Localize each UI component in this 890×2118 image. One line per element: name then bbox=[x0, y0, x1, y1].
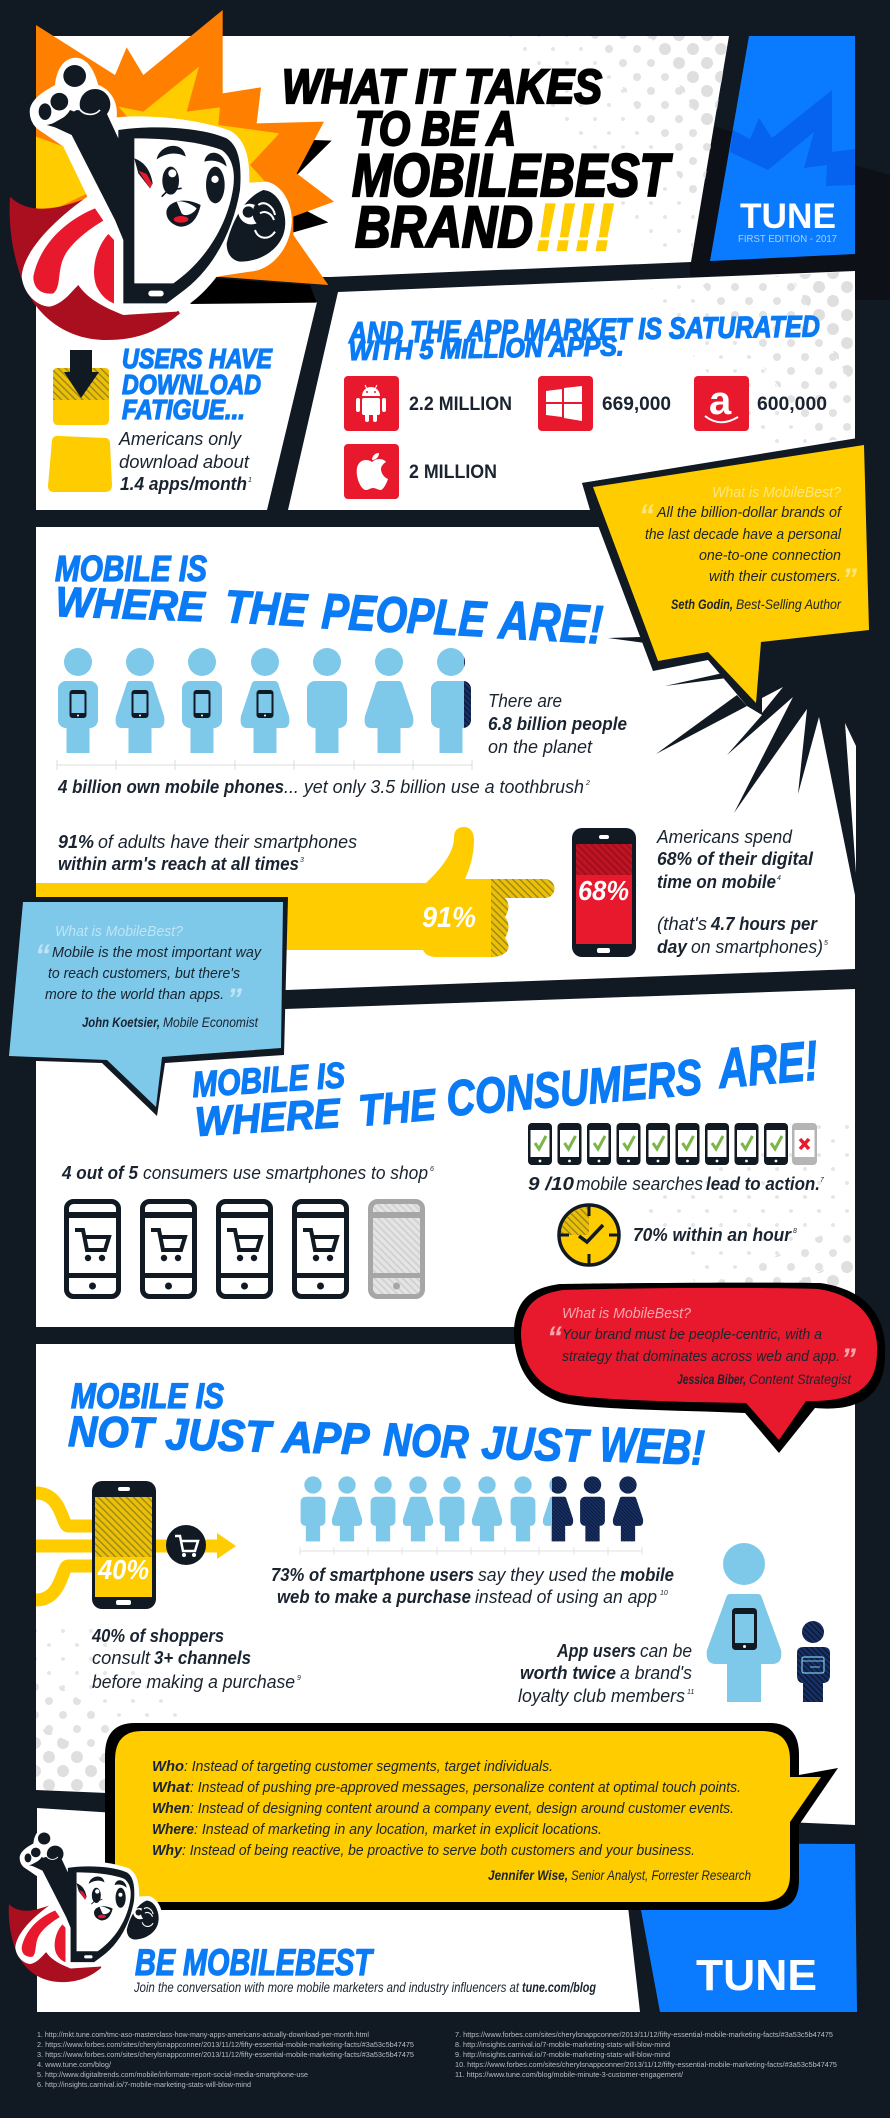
text: searches lead to action: 7 bbox=[820, 1177, 825, 1184]
panel: TUNE first edition: TUNE bbox=[740, 197, 836, 236]
text: join the conversation: Join the conversation with more mobile marketers and industry influencers at bbox=[133, 1979, 520, 1995]
text: mobile web purchase: say they used the bbox=[478, 1565, 616, 1585]
text: app users loyalty: App users bbox=[556, 1641, 636, 1661]
callout: blue John Koetsier quote: John Koetsier, bbox=[82, 1015, 160, 1030]
text: arm's reach bbox=[58, 832, 357, 874]
text: toothbrush fact bbox=[57, 777, 590, 797]
callout: red Jessica Biber quote: What is MobileBest? bbox=[562, 1305, 692, 1322]
text: americans download: download about bbox=[119, 452, 250, 472]
icon: app user and loyalty member bbox=[707, 1543, 830, 1702]
panel: TUNE first edition: FIRST EDITION - 2017 bbox=[738, 233, 837, 245]
icon: cart circle bbox=[166, 1525, 206, 1565]
text: app users loyalty: 11 bbox=[687, 1689, 694, 1696]
heading: mobile is where the people are: PEOPLE bbox=[320, 583, 488, 648]
panel: footer bbox=[37, 1808, 640, 2012]
icon: download arrow with app tiles bbox=[48, 350, 112, 492]
icon: starburst behind mascot bbox=[36, 10, 334, 304]
text: mobile web purchase: instead of using an app bbox=[475, 1587, 657, 1607]
text: mobile web purchase: 73% of smartphone users bbox=[271, 1565, 474, 1585]
heading: mobile is not just app nor just web: NOT bbox=[68, 1408, 157, 1458]
text: shoppers channels bbox=[91, 1626, 301, 1692]
footnotes: 5. http://www.digitaltrends.com/mobile/informate-report-social-media-smartphone-use bbox=[37, 2070, 308, 2079]
panel: where the people are bbox=[36, 527, 855, 990]
text: 6.8 billion people: on the planet bbox=[488, 737, 593, 757]
text: mobile web purchase bbox=[271, 1565, 674, 1607]
text: digital time on mobile: day bbox=[657, 937, 688, 957]
icon: amazon bbox=[694, 376, 749, 431]
footnotes: 2. https://www.forbes.com/sites/cherylsnappconner/2013/11/12/fifty-essential-mobile-marketing-facts/#3a53c5b47475 bbox=[37, 2040, 414, 2049]
text: toothbrush fact: 2 bbox=[585, 780, 590, 787]
callout: yellow Seth Godin quote with burst: Seth Godin, bbox=[671, 597, 733, 612]
heading: mobile is where the people are: THE bbox=[223, 580, 309, 636]
title: TO BE A bbox=[355, 103, 516, 156]
heading: app market saturated bbox=[348, 310, 820, 366]
title bbox=[282, 61, 673, 264]
text: app users loyalty: a brand's bbox=[620, 1663, 692, 1683]
heading: mobile is where the consumers are: WHERE bbox=[194, 1090, 343, 1145]
heading: mobile is not just app nor just web: APP bbox=[281, 1413, 371, 1464]
text: attribution bbox=[488, 1867, 751, 1883]
heading: mobile is where the consumers are: ARE! bbox=[714, 1028, 821, 1100]
text: toothbrush fact: ... yet only 3.5 billion use a toothbrush bbox=[284, 777, 584, 797]
heading: mobile is where the people are: WHERE bbox=[55, 578, 207, 630]
heading: mobile is where the consumers are: CONSUMERS bbox=[444, 1049, 704, 1127]
panel: app market bbox=[288, 271, 855, 510]
footnotes: 8. http://insights.carnival.io/7-mobile-marketing-stats-will-blow-mind bbox=[455, 2040, 670, 2049]
callout: yellow Seth Godin quote with burst: What is MobileBest? bbox=[712, 484, 842, 501]
heading: users have download fatigue bbox=[122, 343, 273, 425]
heading: mobile is not just app nor just web: NOR bbox=[383, 1413, 469, 1468]
callout: yellow Seth Godin quote with burst: ” bbox=[842, 563, 857, 596]
callout: red Jessica Biber quote bbox=[514, 1283, 885, 1453]
callout: red Jessica Biber quote: ” bbox=[841, 1343, 856, 1376]
text: searches lead to action: mobile searches bbox=[576, 1174, 703, 1194]
text: shop with smartphones: 4 out of 5 bbox=[61, 1163, 139, 1183]
text: shoppers channels: before making a purchase bbox=[92, 1672, 295, 1692]
text: shoppers channels: consult bbox=[92, 1648, 151, 1668]
text: app users loyalty: can be bbox=[640, 1641, 692, 1661]
heading: app market saturated: WITH 5 MILLION APPS. bbox=[349, 331, 624, 366]
text: digital time on mobile: (that's bbox=[657, 914, 707, 934]
text: why: : Instead of being reactive, be proactive to serve both customers and your business. bbox=[182, 1842, 695, 1859]
icon: phone 68% bbox=[572, 828, 636, 957]
callout: red Jessica Biber quote: “ bbox=[547, 1321, 562, 1354]
callout: yellow Seth Godin quote with burst: one-to-one connection bbox=[699, 548, 841, 564]
heading: mobile is where the people are bbox=[55, 548, 604, 655]
chart: shopping phones bbox=[66, 1202, 425, 1296]
footnotes: 9. http://insights.carnival.io/7-mobile-marketing-stats-will-blow-mind bbox=[455, 2050, 670, 2059]
title: BRAND bbox=[355, 195, 533, 260]
callout: yellow Seth Godin quote with burst: All the billion-dollar brands of bbox=[656, 505, 843, 521]
panel: footer TUNE logo: TUNE bbox=[696, 1951, 817, 2000]
icon: channels arrow bbox=[36, 1493, 236, 1600]
footnotes: 7. https://www.forbes.com/sites/cherylsnappconner/2013/11/12/fifty-essential-mobile-marketing-facts/#3a53c5b47475 bbox=[455, 2030, 833, 2039]
heading: users have download fatigue: FATIGUE... bbox=[122, 394, 245, 425]
text: mobile web purchase: web to make a purchase bbox=[277, 1587, 471, 1607]
callout: red Jessica Biber quote: Content Strategist bbox=[749, 1372, 852, 1387]
text: within an hour: 8 bbox=[793, 1228, 797, 1235]
footnotes: 4. www.tune.com/blog/ bbox=[37, 2060, 112, 2069]
footnotes: 11. https://www.tune.com/blog/mobile-minute-3-customer-engagement/ bbox=[455, 2070, 684, 2079]
callout: blue John Koetsier quote bbox=[5, 897, 288, 1116]
text: americans download: 1 bbox=[248, 477, 252, 484]
footnotes: 6. http://insights.carnival.io/7-mobile-marketing-stats-will-blow-mind bbox=[37, 2080, 251, 2089]
heading: mobile is where the people are: MOBILE IS bbox=[55, 548, 207, 589]
panel: TUNE first edition bbox=[710, 36, 855, 261]
callout: yellow who what when bbox=[105, 1723, 838, 1910]
text: what: What bbox=[152, 1779, 191, 1796]
text: shoppers channels: 9 bbox=[297, 1675, 301, 1682]
text: arm's reach: 3 bbox=[300, 857, 304, 864]
text: digital time on mobile: 68% of their digital bbox=[657, 849, 814, 869]
text: toothbrush fact: 4 billion own mobile phones bbox=[57, 777, 284, 797]
text: americans download: 1.4 apps/month bbox=[120, 474, 247, 494]
text: searches lead to action: 9 /10 bbox=[528, 1174, 574, 1194]
footnotes: 10. https://www.forbes.com/sites/cherylsnappconner/2013/11/12/fifty-essential-mobile-marketing-facts/#3a53c5b47475 bbox=[455, 2060, 837, 2069]
heading: mobile is not just app nor just web bbox=[68, 1377, 705, 1476]
chart: mobile search phones bbox=[528, 1123, 817, 1165]
icon: apple bbox=[344, 444, 399, 499]
text: why: Why bbox=[152, 1842, 183, 1859]
text: shop with smartphones: consumers use smartphones to shop bbox=[143, 1163, 428, 1183]
icon: mascot phone superhero bbox=[10, 58, 292, 340]
panel: not just app nor just web bbox=[36, 1344, 855, 1825]
heading: be mobilebest: BE MOBILEBEST bbox=[135, 1942, 375, 1983]
title: WHAT IT TAKES bbox=[282, 61, 602, 114]
text: where: : Instead of marketing in any location, market in explicit locations. bbox=[194, 1821, 602, 1838]
heading: mobile is not just app nor just web: JUST bbox=[481, 1416, 592, 1472]
text: when: : Instead of designing content around a company event, design around customer events. bbox=[190, 1800, 734, 1817]
text: digital time on mobile: 4 bbox=[777, 875, 781, 882]
footnotes: 3. https://www.forbes.com/sites/cherylsnappconner/2013/11/12/fifty-essential-mobile-marketing-facts/#3a53c5b47475 bbox=[37, 2050, 414, 2059]
icon: windows bbox=[538, 376, 593, 431]
text: digital time on mobile: on smartphones) bbox=[691, 937, 823, 957]
text: digital time on mobile: time on mobile bbox=[657, 872, 776, 892]
heading: mobile is where the consumers are: MOBILE IS bbox=[191, 1054, 346, 1105]
stat: amazon apps: 600,000 bbox=[757, 394, 827, 415]
callout: yellow Seth Godin quote with burst: the last decade have a personal bbox=[645, 527, 842, 543]
text: arm's reach: 91% bbox=[58, 832, 94, 852]
text: join the conversation: tune.com/blog bbox=[522, 1979, 596, 1995]
text: americans download: Americans only bbox=[118, 429, 242, 449]
callout: blue John Koetsier quote: What is MobileBest? bbox=[55, 923, 184, 940]
icon: amazon: a bbox=[709, 379, 732, 423]
callout: blue John Koetsier quote: to reach customers, but there's bbox=[48, 966, 240, 982]
heading: mobile is where the consumers are bbox=[191, 1028, 821, 1145]
text: attribution: Senior Analyst, Forrester Research bbox=[571, 1867, 751, 1883]
callout: blue John Koetsier quote: ” bbox=[227, 983, 242, 1016]
text: americans download bbox=[118, 429, 252, 494]
text: app users loyalty bbox=[518, 1641, 694, 1706]
text: attribution: Jennifer Wise, bbox=[488, 1867, 568, 1883]
footnotes: 1. http://mkt.tune.com/tmc-aso-masterclass-how-many-apps-americans-actually-download-per-month.html bbox=[37, 2030, 369, 2039]
heading: mobile is where the people are: ARE! bbox=[496, 590, 604, 655]
callout: yellow Seth Godin quote with burst: with their customers. bbox=[709, 569, 841, 585]
heading: mobile is not just app nor just web: WEB! bbox=[599, 1418, 705, 1476]
chart: smartphone users row bbox=[300, 1476, 643, 1555]
title: !!!! bbox=[536, 190, 614, 264]
panel: where the consumers are bbox=[36, 989, 855, 1327]
callout: blue John Koetsier quote: “ bbox=[35, 939, 50, 972]
icon: phone 40%: 40% bbox=[97, 1554, 149, 1585]
stat: apple apps: 2 MILLION bbox=[409, 462, 497, 483]
text: shop with smartphones: 6 bbox=[430, 1166, 434, 1173]
heading: mobile is not just app nor just web: MOBILE IS bbox=[71, 1377, 224, 1416]
stat: windows apps: 669,000 bbox=[602, 394, 671, 415]
callout: yellow Seth Godin quote with burst bbox=[582, 436, 890, 900]
icon: small mascot phone superhero bbox=[9, 1829, 162, 1982]
callout: yellow Seth Godin quote with burst: Best-Selling Author bbox=[736, 597, 841, 612]
title: MOBILEBEST bbox=[352, 142, 673, 209]
text: who: Who bbox=[152, 1758, 184, 1775]
heading: mobile is not just app nor just web: JUST bbox=[165, 1410, 274, 1462]
callout: blue John Koetsier quote: Mobile Economist bbox=[163, 1015, 259, 1030]
text: 6.8 billion people: There are bbox=[488, 691, 562, 711]
text: arm's reach: of adults have their smartphones bbox=[98, 832, 357, 852]
text: searches lead to action bbox=[528, 1174, 825, 1194]
heading: users have download fatigue: DOWNLOAD bbox=[122, 369, 261, 400]
icon: clock bbox=[559, 1205, 619, 1265]
callout: blue John Koetsier quote: more to the world than apps. bbox=[45, 987, 224, 1003]
text: digital time on mobile: 4.7 hours per bbox=[710, 914, 818, 934]
text: digital time on mobile: Americans spend bbox=[656, 827, 793, 847]
heading: mobile is where the consumers are: THE bbox=[357, 1080, 439, 1136]
text: who: : Instead of targeting customer segments, target individuals. bbox=[184, 1758, 553, 1775]
text: digital time on mobile bbox=[656, 827, 828, 957]
callout: yellow Seth Godin quote with burst: “ bbox=[639, 499, 654, 532]
text: when: When bbox=[152, 1800, 190, 1817]
icon: pointing hand 91%: 91% bbox=[422, 902, 476, 934]
text: mobile web purchase: mobile bbox=[620, 1565, 674, 1585]
chart: people row bbox=[57, 648, 472, 770]
icon: android bbox=[344, 376, 399, 431]
icon: phone 40% bbox=[92, 1481, 156, 1609]
stat: android apps: 2.2 MILLION bbox=[409, 394, 512, 415]
callout: red Jessica Biber quote: Your brand must be people-centric, with a bbox=[562, 1327, 822, 1343]
text: digital time on mobile: 5 bbox=[824, 940, 828, 947]
text: 6.8 billion people: 6.8 billion people bbox=[488, 714, 627, 734]
callout: red Jessica Biber quote: Jessica Biber, bbox=[677, 1372, 746, 1387]
text: where: Where bbox=[152, 1821, 194, 1838]
heading: users have download fatigue: USERS HAVE bbox=[122, 343, 273, 374]
text: within an hour: 70% within an hour bbox=[633, 1225, 792, 1245]
callout: blue John Koetsier quote: Mobile is the most important way bbox=[52, 945, 262, 961]
callout: red Jessica Biber quote: strategy that dominates across web and app. bbox=[562, 1349, 840, 1365]
text: searches lead to action: lead to action. bbox=[706, 1174, 820, 1194]
icon: pointing hand 91% bbox=[36, 827, 554, 957]
panel: header bbox=[37, 36, 729, 277]
text: shoppers channels: 40% of shoppers bbox=[91, 1626, 224, 1646]
text: app users loyalty: loyalty club members bbox=[518, 1686, 685, 1706]
text: 6.8 billion people bbox=[488, 691, 627, 757]
text: what: : Instead of pushing pre-approved messages, personalize content at optimal touch points. bbox=[190, 1779, 741, 1796]
text: shoppers channels: 3+ channels bbox=[154, 1648, 251, 1668]
panel: download fatigue bbox=[36, 302, 317, 510]
text: mobile web purchase: 10 bbox=[660, 1590, 668, 1597]
footnotes bbox=[37, 2030, 837, 2089]
text: arm's reach: within arm's reach at all times bbox=[58, 854, 299, 874]
icon: phone 68%: 68% bbox=[578, 875, 629, 906]
panel: footer TUNE logo bbox=[641, 1843, 857, 2012]
text: app users loyalty: worth twice bbox=[520, 1663, 616, 1683]
